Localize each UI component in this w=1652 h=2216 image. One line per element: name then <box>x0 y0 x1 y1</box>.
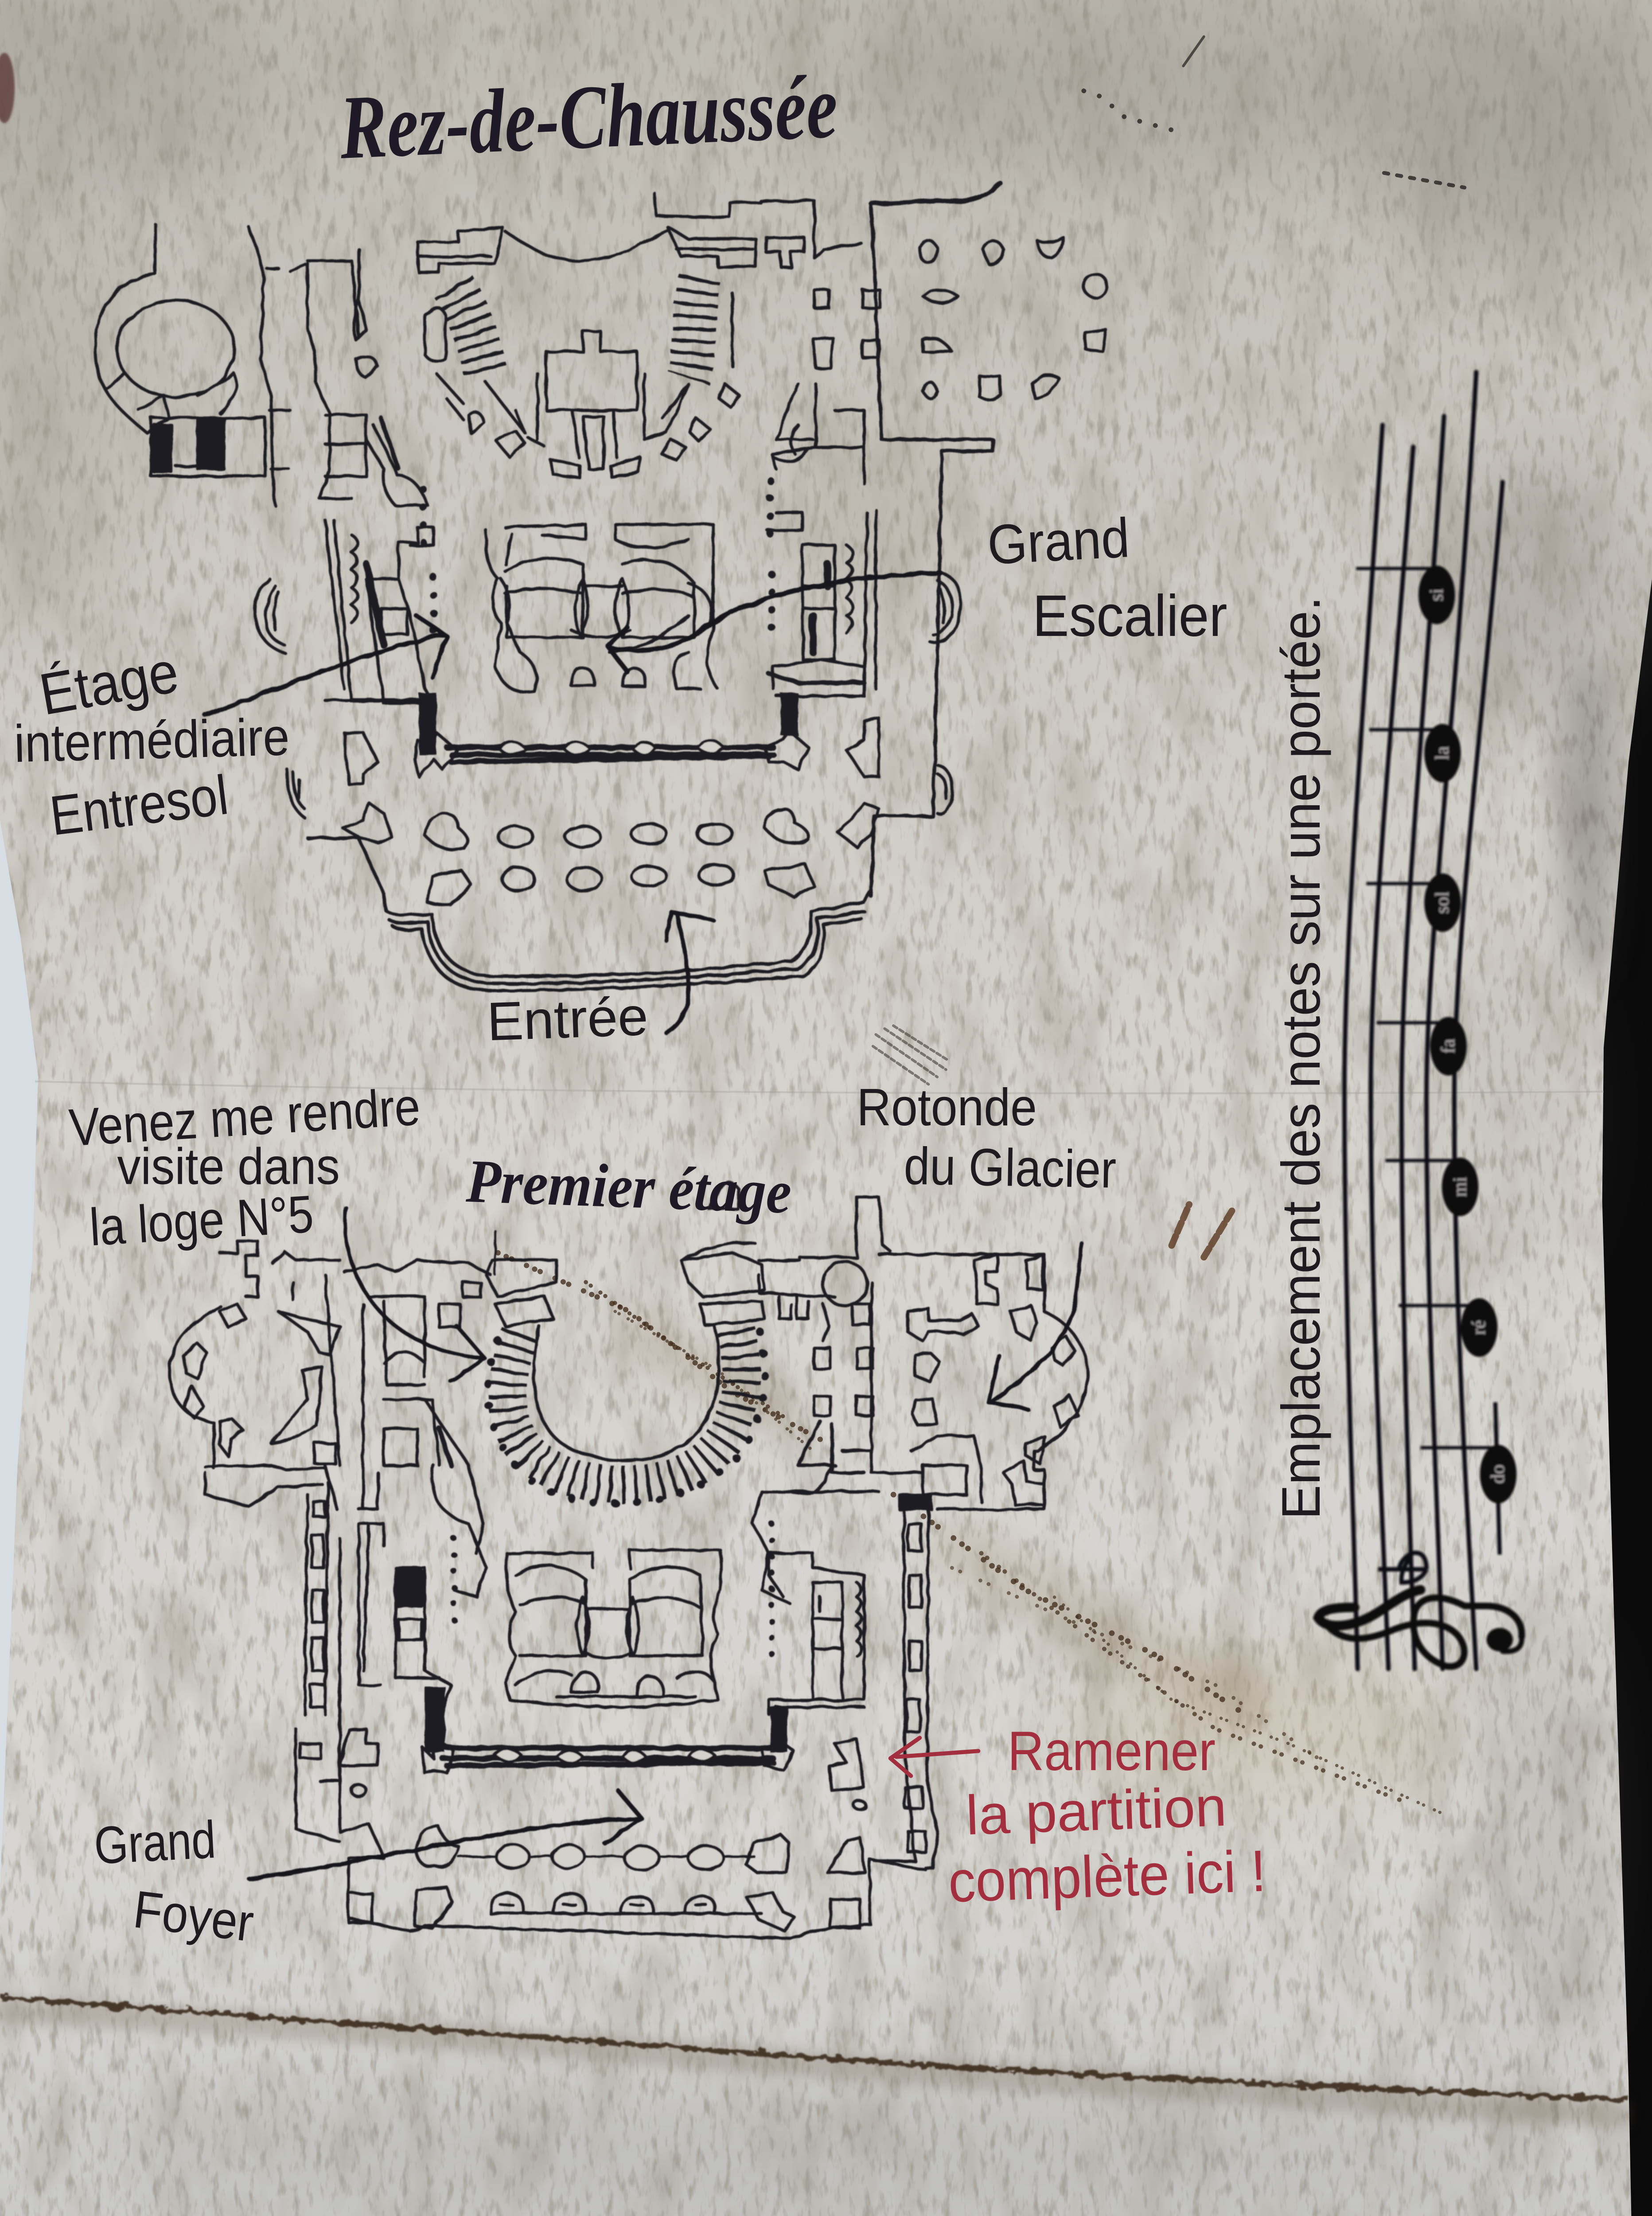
right rooms and columns hall <box>772 183 1107 897</box>
left and right side stairs <box>255 571 961 818</box>
arrow: red pointer <box>890 1738 978 1776</box>
foyer columns <box>343 803 879 905</box>
note: sol <box>1424 873 1461 932</box>
note: la <box>1424 724 1461 782</box>
grand foyer <box>340 1824 926 1939</box>
heading: Premier étage: Premier étage <box>465 1147 793 1227</box>
note: si: si <box>1426 589 1447 601</box>
entrance steps <box>308 838 871 991</box>
label: Grand Foyer <box>93 1810 257 1953</box>
music staff <box>1318 372 1522 1669</box>
left side staircase <box>325 520 433 755</box>
note stems <box>1356 569 1500 1555</box>
floor plan: ground floor <box>95 183 1107 991</box>
arrow: Grand Foyer <box>249 1791 642 1878</box>
label: Grand Escalier: Escalier <box>1032 583 1227 649</box>
stage front and wings <box>417 193 861 460</box>
note: si <box>1418 566 1455 624</box>
label: Étage intermédiaire Entresol: intermédiaire <box>13 707 290 773</box>
label: Rotonde du Glacier <box>857 1078 1117 1199</box>
callout: Ramener la partition complète ici: Ramener <box>1008 1720 1216 1782</box>
auditorium horseshoe boxes <box>486 1182 764 1504</box>
label: Grand Escalier: Grand <box>986 506 1131 576</box>
note: ré <box>1461 1298 1497 1357</box>
callout: Ramener la partition complète ici: la partition <box>965 1775 1227 1846</box>
label: Étage intermédiaire Entresol <box>13 639 290 847</box>
callout: Ramener la partition complète ici: complète ici ! <box>947 1838 1267 1915</box>
note: ré: ré <box>1469 1320 1489 1335</box>
arrow: Entrée <box>666 911 713 1033</box>
left long corridor <box>296 1465 340 1842</box>
arrows in black <box>205 573 1081 1878</box>
note: la: la <box>1432 746 1453 760</box>
callout: Ramener la partition complète ici <box>947 1720 1267 1915</box>
arrow: Entresol <box>205 616 447 715</box>
first floor wall and piers <box>340 1729 865 1810</box>
central staircase <box>505 1550 721 1707</box>
label: Entrée: Entrée <box>486 986 649 1052</box>
splatter stains <box>498 37 1465 1817</box>
left rooms beside auditorium <box>344 1260 491 1597</box>
arrow: loge N°5 <box>345 1207 485 1382</box>
note: mi: mi <box>1449 1177 1470 1197</box>
note: do: do <box>1488 1464 1508 1483</box>
label: Grand Foyer: Grand <box>93 1810 217 1875</box>
fold lines <box>0 1081 1630 2115</box>
vertical label: Emplacement des notes: Emplacement des notes sur une portée. <box>1270 597 1331 1519</box>
arrow: Rotonde du Glacier <box>989 1243 1081 1409</box>
note: fa: fa <box>1438 1039 1459 1053</box>
note: mi <box>1442 1158 1478 1216</box>
staff lines <box>1344 372 1503 1669</box>
grand staircase centre <box>486 525 717 692</box>
right rooms and rotonde <box>753 1197 1087 1604</box>
arrow: Grand Escalier <box>608 573 940 671</box>
label: Venez me rendre visite <box>67 1077 422 1257</box>
label: Venez me rendre visite: Venez me rendre <box>67 1077 422 1157</box>
label: Grand Escalier <box>986 506 1227 649</box>
note: sol: sol <box>1432 891 1453 914</box>
note: fa <box>1430 1017 1467 1076</box>
stage centre T <box>485 331 688 478</box>
left rotunda wing <box>170 1241 340 1506</box>
label: Venez me rendre visite: la loge N°5 <box>88 1185 315 1257</box>
label: Rotonde du Glacier: du Glacier <box>904 1136 1117 1199</box>
left staircase block <box>359 1524 454 1752</box>
icon: treble clef <box>1318 1590 1522 1666</box>
right side staircase <box>768 510 876 736</box>
label: Étage intermédiaire Entresol: Étage <box>35 639 183 728</box>
title: Rez-de-Chaussée: Rez-de-Chaussée <box>337 56 840 178</box>
left rotunda <box>95 224 265 476</box>
label: Étage intermédiaire Entresol: Entresol <box>47 763 231 847</box>
icon: flat sign <box>1378 1553 1426 1583</box>
note: do <box>1480 1445 1516 1503</box>
left wing rooms <box>249 227 428 506</box>
label: Venez me rendre visite: visite dans <box>117 1137 340 1195</box>
dotted colonnades <box>423 480 772 639</box>
entrance wall and piers <box>344 718 879 784</box>
right long corridor <box>874 1494 937 1868</box>
label: Grand Foyer: Foyer <box>130 1880 257 1953</box>
right staircase block <box>769 1524 864 1752</box>
floor plan: first floor <box>170 1182 1087 1939</box>
label: Rotonde du Glacier: Rotonde <box>857 1078 1037 1137</box>
